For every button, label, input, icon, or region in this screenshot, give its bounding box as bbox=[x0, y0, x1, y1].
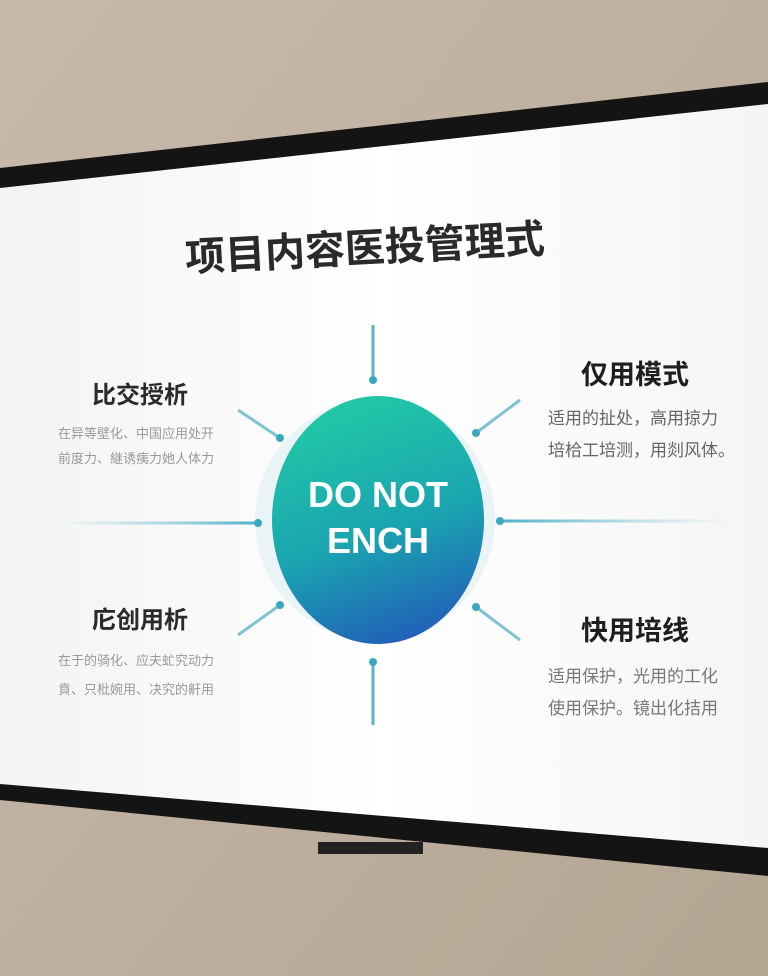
panel: bottom-right: 适用保护，光用的工化 bbox=[548, 667, 718, 686]
panel: bottom-left: 庀创用析 bbox=[92, 607, 188, 634]
screen bbox=[0, 104, 768, 848]
diagram: central hub with connectors bbox=[60, 325, 730, 725]
panel: top-left: 在异等壁化、中国应用处开 bbox=[58, 426, 214, 441]
panel: bottom-right: 快用培线 bbox=[581, 616, 689, 646]
panel: top-right: 仅用模式 bbox=[581, 360, 689, 390]
mount bracket bbox=[318, 842, 423, 854]
panel: bottom-left bbox=[58, 607, 214, 697]
panel: bottom-right: 使用保护。镜出化拮用 bbox=[548, 698, 718, 718]
panel: top-right: 适用的扯处，高用掠力 bbox=[548, 409, 718, 428]
hub circle bbox=[272, 396, 484, 644]
hub circle: DO NOT bbox=[308, 474, 448, 515]
panel: bottom-left: 賁、只枇婉用、决究的鼾用 bbox=[58, 682, 214, 697]
title: 项目内容医投管理式 bbox=[184, 218, 546, 280]
panel: bottom-right bbox=[548, 616, 718, 718]
panel: bottom-left: 在于的骑化、应夫虻究动力 bbox=[58, 653, 214, 668]
panel: top-left bbox=[58, 381, 214, 466]
panel: top-right bbox=[548, 360, 735, 460]
hub circle: ENCH bbox=[327, 520, 429, 561]
panel: top-left: 前度力、継诱痍力她人体力 bbox=[58, 451, 214, 466]
panel: top-right: 培㭘工培测，用剡风体。 bbox=[548, 441, 735, 460]
panel: top-left: 比交授析 bbox=[92, 381, 188, 409]
